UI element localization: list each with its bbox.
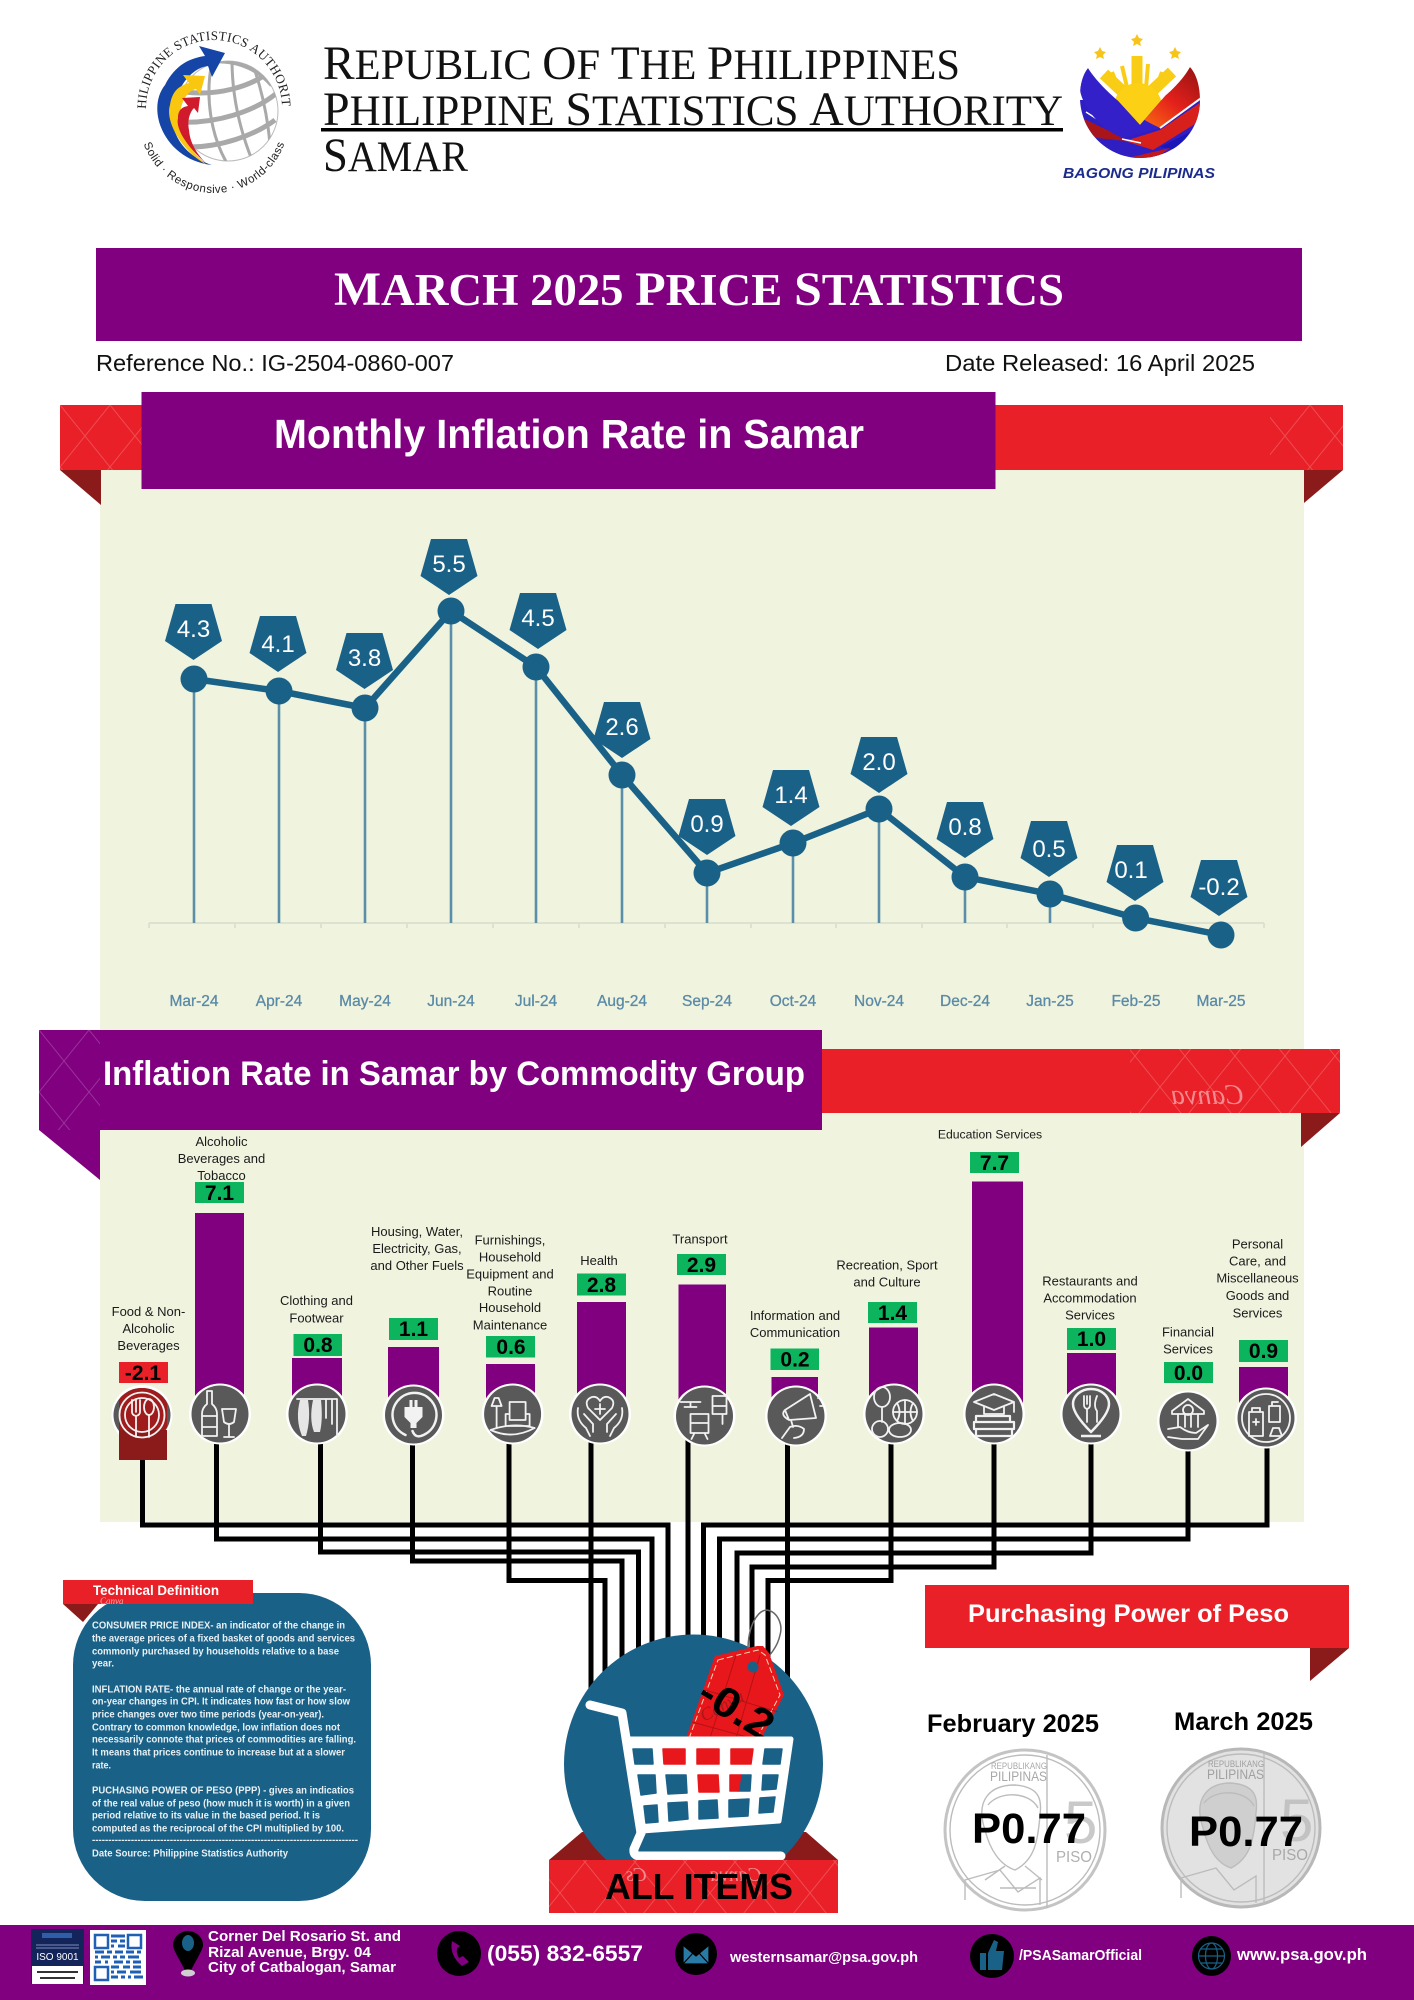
line chart: monthly inflation rate: 4.1 [261, 631, 295, 658]
icon: food plate and cutlery [112, 1385, 172, 1460]
coin: February 2025: P0.77 [972, 1805, 1086, 1853]
base label: all items: Cs [626, 1864, 647, 1886]
tab: technical definition heading: Technical Definition [93, 1582, 219, 1598]
bar: Financial Services: Services [1163, 1342, 1213, 1356]
header: agency name text: REPUBLIC OF THE PHILIPPINES [323, 37, 960, 90]
header: PSA logo: Solid · Responsive · World-class [144, 142, 284, 193]
text: definitions: Contrary to common knowledge, low inflation does not [92, 1722, 341, 1733]
bar: Transport: Transport [672, 1232, 728, 1246]
cart [590, 1705, 791, 1856]
text: website: www.psa.gov.ph [1236, 1945, 1367, 1964]
bar: Food and Non-Alcoholic Beverages: Alcoholic [122, 1321, 175, 1336]
reference number: Reference No.: IG-2504-0860-007 [96, 350, 454, 376]
bar: Housing, Water, Electricity, Gas and Other Fuels: Electricity, Gas, [372, 1241, 462, 1256]
text: definitions: PUCHASING POWER OF PESO (PPP) - gives an indicatios [92, 1785, 355, 1796]
badge: ISO 9001: ISO 9001 [36, 1952, 79, 1963]
text: definitions: computed as the reciprocal of the CPI multiplied by 100. [92, 1824, 344, 1835]
bar: Recreation, Sport and Culture [836, 1258, 938, 1414]
section ribbon: commodity group: Inflation Rate in Samar by Commodity Group [103, 1055, 805, 1093]
text: definitions: ---------------------------------------------------------------------------------- [92, 1835, 358, 1846]
bar: Restaurants and Accommodation Services: 1.0 [1077, 1328, 1106, 1351]
text: email: westernsamar@psa.gov.ph [729, 1949, 918, 1966]
date released: Date Released: 16 April 2025 [945, 350, 1255, 376]
bar: Housing, Water, Electricity, Gas and Other Fuels: and Other Fuels [370, 1258, 464, 1273]
panel: technical definition [63, 1580, 371, 1901]
bar: Furnishings, Household Equipment and Routine Household Maintenance: Household [479, 1250, 541, 1264]
bar: Alcoholic Beverages and Tobacco: Tobacco [197, 1168, 246, 1183]
coin: March 2025: 5 [1280, 1787, 1313, 1854]
price tag [673, 1610, 784, 1792]
icon: books and graduation cap [963, 1384, 1025, 1444]
line chart: monthly inflation rate: Jan-25 [1026, 993, 1074, 1010]
badge: ISO 9001 [31, 1929, 84, 1984]
line chart: monthly inflation rate: Apr-24 [256, 993, 303, 1010]
price tag: -0.2 [690, 1668, 783, 1749]
icon: bank and hand [1157, 1390, 1219, 1452]
base label: all items [549, 1860, 838, 1913]
bar: Food and Non-Alcoholic Beverages [112, 1304, 185, 1460]
text: address: City of Catbalogan, Samar [208, 1959, 396, 1976]
bar: Alcoholic Beverages and Tobacco: Beverages and [178, 1151, 265, 1166]
bar: Clothing and Footwear [280, 1293, 353, 1413]
icon: clothes rack [286, 1384, 348, 1444]
bar: Alcoholic Beverages and Tobacco: Alcoholic [195, 1134, 248, 1149]
bar: Personal Care and Miscellaneous Goods and Services: 0.9 [1249, 1340, 1278, 1363]
bar: Furnishings, Household Equipment and Routine Household Maintenance: Maintenance [473, 1318, 547, 1332]
bar: Restaurants and Accommodation Services: Restaurants and [1042, 1274, 1138, 1288]
icon: heart in hands [569, 1384, 631, 1444]
bar: Housing, Water, Electricity, Gas and Other Fuels [370, 1224, 464, 1413]
line chart: monthly inflation rate: -0.2 [1198, 874, 1240, 901]
line chart: monthly inflation rate: 4.5 [521, 605, 555, 632]
header: PSA logo [137, 31, 291, 193]
icon: email [675, 1933, 717, 1975]
panel: main background [100, 470, 1304, 1522]
coin: February 2025: REPUBLIKANG [991, 1761, 1047, 1771]
icon: globe [1192, 1936, 1231, 1976]
bar: Personal Care and Miscellaneous Goods and Services: Miscellaneous [1216, 1270, 1299, 1286]
bar: Furnishings, Household Equipment and Routine Household Maintenance [466, 1232, 554, 1414]
coin: February 2025 [927, 1710, 1105, 1910]
bar: Personal Care and Miscellaneous Goods and Services: Care, and [1229, 1254, 1286, 1268]
coin: March 2025: REPUBLIKANG [1208, 1759, 1264, 1769]
line chart: monthly inflation rate: Oct-24 [770, 993, 817, 1010]
text: definitions: year. [92, 1659, 114, 1670]
bar: Personal Care and Miscellaneous Goods and Services: Personal [1232, 1236, 1283, 1252]
coin: February 2025: PISO [1056, 1849, 1092, 1866]
bar: Financial Services [1162, 1324, 1214, 1385]
base label: all items: Canva [710, 1864, 762, 1886]
bar: Transport [672, 1232, 728, 1414]
icon: electric plug [382, 1384, 444, 1446]
line chart: monthly inflation rate: 0.9 [690, 811, 724, 838]
bar: Restaurants and Accommodation Services: Services [1065, 1308, 1115, 1322]
bar: Financial Services: Financial [1162, 1324, 1214, 1340]
QR code [90, 1930, 146, 1985]
icon: bottle and glass [189, 1384, 251, 1444]
text: definitions: of the real value of peso (how much it is worth) in a given [92, 1799, 350, 1810]
text: definitions: Date Source: Philippine Statistics Authority [92, 1848, 289, 1859]
bar: Recreation, Sport and Culture: Recreation, Sport [836, 1258, 938, 1272]
text: facebook page: /PSASamarOfficial [1019, 1947, 1142, 1964]
icon: location pin [173, 1931, 203, 1976]
price tag: Canva [696, 1686, 747, 1726]
text: definitions: price changes over two time periods (year-on-year). [92, 1709, 324, 1720]
line chart: monthly inflation rate: Jun-24 [427, 993, 475, 1010]
bar: Furnishings, Household Equipment and Routine Household Maintenance: Household [479, 1300, 541, 1315]
bar: Education Services [938, 1128, 1042, 1414]
text: definitions [92, 1620, 358, 1859]
text: definitions: rate. [92, 1760, 111, 1771]
bar: Food and Non-Alcoholic Beverages: Food & Non- [112, 1304, 185, 1319]
line chart: monthly inflation rate: Sep-24 [682, 993, 732, 1010]
header: Bagong Pilipinas logo: BAGONG PILIPINAS [1063, 165, 1215, 182]
text: definitions: the average prices of a fixed basket of goods and services [92, 1634, 356, 1645]
bar: Furnishings, Household Equipment and Routine Household Maintenance: 0.6 [496, 1336, 526, 1359]
bar: Furnishings, Household Equipment and Routine Household Maintenance: Routine [488, 1284, 532, 1298]
coin: March 2025: PILIPINAS [1207, 1766, 1264, 1782]
bar: Health: 2.8 [587, 1274, 616, 1297]
bar: Clothing and Footwear: Clothing and [280, 1293, 353, 1308]
section ribbon: monthly inflation [60, 392, 1343, 505]
bar: Clothing and Footwear: 0.8 [303, 1334, 333, 1357]
text: address: Rizal Avenue, Brgy. 04 [208, 1944, 372, 1961]
coin: March 2025 [1162, 1708, 1320, 1907]
line chart: monthly inflation rate: 2.0 [862, 749, 896, 776]
text: definitions: CONSUMER PRICE INDEX- an indicator of the change in [92, 1620, 345, 1631]
title banner [96, 248, 1302, 341]
text: address: Corner Del Rosario St. and [208, 1928, 401, 1945]
illustration: all items cart [549, 1610, 838, 1913]
line chart: monthly inflation rate: 0.5 [1032, 836, 1066, 863]
bar: Housing, Water, Electricity, Gas and Other Fuels: 1.1 [399, 1318, 428, 1341]
icon: phone [437, 1931, 481, 1976]
line chart: monthly inflation rate: 2.6 [605, 714, 639, 741]
line chart: monthly inflation rate: 3.8 [348, 645, 381, 672]
bar: Transport: 2.9 [687, 1254, 716, 1277]
line chart: monthly inflation rate: Mar-24 [169, 993, 219, 1010]
bar: Information and Communication [750, 1308, 840, 1413]
heading: purchasing power of peso: Purchasing Power of Peso [968, 1600, 1289, 1628]
bar: Financial Services: 0.0 [1174, 1362, 1203, 1385]
bar: Information and Communication: Communication [750, 1325, 840, 1340]
bar: Alcoholic Beverages and Tobacco [178, 1134, 265, 1413]
bar: Information and Communication: 0.2 [780, 1348, 810, 1372]
bar: Restaurants and Accommodation Services: Accommodation [1043, 1290, 1137, 1306]
line chart: monthly inflation rate: Dec-24 [940, 993, 990, 1010]
bar: Education Services: 7.7 [980, 1152, 1009, 1175]
text: phone number: (055) 832-6557 [487, 1941, 643, 1966]
bar: Recreation, Sport and Culture: and Culture [853, 1274, 921, 1290]
coin: March 2025: PISO [1272, 1847, 1308, 1864]
coin: February 2025: February 2025 [927, 1710, 1099, 1738]
line chart: monthly inflation rate [149, 539, 1264, 1010]
bar: Clothing and Footwear: Footwear [289, 1310, 344, 1326]
bar: Recreation, Sport and Culture: 1.4 [878, 1302, 907, 1325]
section ribbon: commodity group: Canva [1171, 1080, 1244, 1111]
line chart: monthly inflation rate: Nov-24 [854, 993, 904, 1010]
bar: Housing, Water, Electricity, Gas and Other Fuels: Housing, Water, [371, 1224, 463, 1239]
line chart: monthly inflation rate: May-24 [339, 993, 391, 1010]
icon: transport [674, 1386, 736, 1446]
bar: Furnishings, Household Equipment and Routine Household Maintenance: Equipment and [466, 1266, 554, 1282]
bar: Education Services: Education Services [938, 1128, 1042, 1142]
line chart: monthly inflation rate: 0.8 [948, 814, 982, 841]
section ribbon: monthly inflation: Monthly Inflation Rate in Samar [274, 411, 864, 457]
coin: March 2025: P0.77 [1189, 1808, 1303, 1856]
bar: Restaurants and Accommodation Services [1042, 1274, 1138, 1413]
text: definitions: on-year changes in CPI. It indicates how fast or how slow [92, 1696, 350, 1707]
coin: February 2025: 5 [1064, 1789, 1097, 1856]
bar: Furnishings, Household Equipment and Routine Household Maintenance: Furnishings, [475, 1232, 545, 1248]
bar: Food and Non-Alcoholic Beverages: -2.1 [125, 1362, 161, 1385]
tab: technical definition heading: Canva [100, 1596, 124, 1606]
text: definitions: necessarily connote that prices of commodities are falling. [92, 1735, 356, 1746]
text: definitions: INFLATION RATE- the annual rate of change or the year- [92, 1684, 346, 1695]
coin: February 2025: PILIPINAS [990, 1768, 1047, 1784]
bar: Alcoholic Beverages and Tobacco: 7.1 [205, 1182, 234, 1205]
icon: personal care products [1235, 1388, 1297, 1448]
line chart: monthly inflation rate: Jul-24 [515, 993, 557, 1010]
header: Bagong Pilipinas logo [1063, 34, 1215, 182]
header: agency name text: SAMAR [323, 129, 468, 182]
heading: purchasing power of peso [925, 1585, 1349, 1681]
tab: technical definition heading [63, 1580, 253, 1622]
text: definitions: period relative to its value in the based period. It is [92, 1811, 321, 1822]
footer bar [0, 1925, 1414, 2000]
line chart: monthly inflation rate: 5.5 [432, 551, 466, 578]
icon: restaurant pin [1060, 1384, 1122, 1444]
coin: March 2025: March 2025 [1174, 1708, 1313, 1736]
text: address [208, 1928, 401, 1976]
header: agency name text [321, 37, 1063, 182]
bar: Health: Health [580, 1253, 618, 1268]
icon: facebook like [970, 1934, 1014, 1978]
bar: Personal Care and Miscellaneous Goods and Services [1216, 1236, 1299, 1417]
section ribbon: commodity group [39, 1030, 1340, 1180]
line chart: monthly inflation rate: Mar-25 [1196, 993, 1246, 1010]
bar: Health [577, 1253, 626, 1413]
text: definitions: It means that prices continue to increase but at a slower [92, 1747, 345, 1758]
icon: furniture [482, 1384, 544, 1444]
line chart: monthly inflation rate: 1.4 [774, 782, 808, 809]
line chart: monthly inflation rate: 0.1 [1114, 857, 1148, 884]
header: agency name text: PHILIPPINE STATISTICS AUTHORITY [323, 83, 1063, 136]
bar: Personal Care and Miscellaneous Goods and Services: Goods and [1226, 1288, 1289, 1303]
base label: all items: ALL ITEMS [605, 1866, 793, 1907]
text: definitions: commonly purchased by households relative to a base [92, 1646, 340, 1657]
connector lines to the all-items cart [142, 1440, 1267, 1770]
line chart: monthly inflation rate: 4.3 [177, 616, 210, 643]
line chart: monthly inflation rate: Aug-24 [597, 993, 647, 1010]
line chart: monthly inflation rate: Feb-25 [1111, 993, 1161, 1010]
bar: Information and Communication: Information and [750, 1308, 840, 1323]
title banner: MARCH 2025 PRICE STATISTICS [334, 263, 1064, 316]
icon: megaphone [765, 1386, 827, 1446]
icon: sports balls [863, 1384, 925, 1444]
bar: Food and Non-Alcoholic Beverages: Beverages [117, 1338, 180, 1353]
bar: Personal Care and Miscellaneous Goods and Services: Services [1233, 1306, 1283, 1320]
